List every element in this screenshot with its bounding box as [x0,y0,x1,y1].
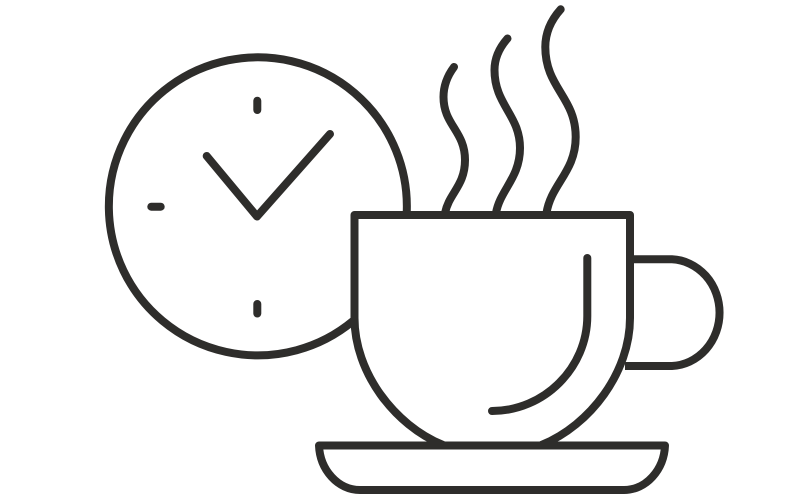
cup highlight [492,258,587,411]
icon: coffee cup [354,215,720,445]
cup handle [625,259,720,366]
icon: steam [444,9,576,213]
icon: saucer [319,446,665,490]
icon: clock [109,57,407,355]
